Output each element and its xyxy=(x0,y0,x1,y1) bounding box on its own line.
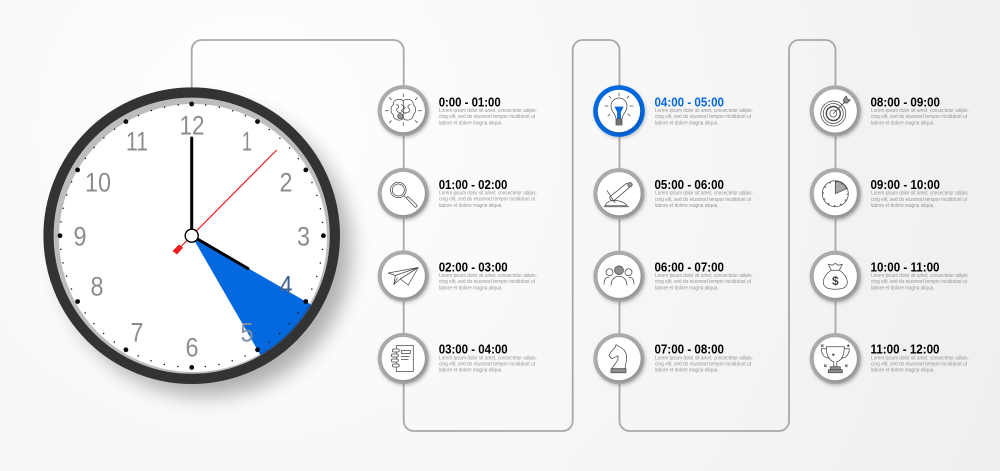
clock dark rim xyxy=(48,92,335,379)
description xyxy=(655,355,753,374)
node ring xyxy=(593,251,645,302)
clock numerals: 10 xyxy=(85,168,111,198)
description: Lorem ipsum dolor sit amet, consectetur adipis- xyxy=(871,191,969,197)
node ring xyxy=(810,85,861,137)
heading: 10:00 - 11:00 xyxy=(870,259,940,274)
step 03:00 - 04:00 xyxy=(378,333,537,384)
node ring xyxy=(810,333,861,384)
icon: magnifier xyxy=(390,182,417,207)
red second hand xyxy=(172,150,277,254)
description: labore et dolore magna aliqua. xyxy=(871,285,935,291)
description: cing elit, sed do eiusmod tempor incididunt ut xyxy=(871,362,967,368)
description: Lorem ipsum dolor sit amet, consectetur adipis- xyxy=(439,273,537,279)
description: cing elit, sed do eiusmod tempor incididunt ut xyxy=(655,114,751,120)
hour hand xyxy=(192,236,248,268)
step 06:00 - 07:00 xyxy=(593,251,753,302)
icon: brain xyxy=(385,94,421,126)
icon: chess knight xyxy=(609,345,627,373)
description: labore et dolore magna aliqua. xyxy=(871,120,935,126)
icon: notebook xyxy=(391,346,413,372)
icon: money bag: $ xyxy=(832,274,839,288)
step 04:00 - 05:00 highlighted xyxy=(593,85,753,137)
blue sector 04:00 to 05:00 xyxy=(192,236,311,355)
description: Lorem ipsum dolor sit amet, consectetur adipis- xyxy=(655,273,753,279)
description: labore et dolore magna aliqua. xyxy=(655,368,719,374)
description: Lorem ipsum dolor sit amet, consectetur adipis- xyxy=(871,273,969,279)
heading: 09:00 - 10:00 xyxy=(870,177,940,192)
description xyxy=(655,191,753,209)
icon: team xyxy=(604,266,634,285)
node ring xyxy=(593,168,645,219)
heading: 11:00 - 12:00 xyxy=(870,342,940,356)
node ring xyxy=(593,333,645,384)
clock numerals: 6 xyxy=(186,332,198,362)
description: labore et dolore magna aliqua. xyxy=(871,368,935,374)
description xyxy=(439,190,537,209)
heading: 08:00 - 09:00 xyxy=(870,94,940,110)
step 08:00 - 09:00 xyxy=(810,85,969,137)
clock numerals: 11 xyxy=(126,126,148,156)
clock numerals: 4 xyxy=(280,270,292,300)
icon: paper plane xyxy=(388,268,418,285)
description xyxy=(871,355,969,374)
description: cing elit, sed do eiusmod tempor incididunt ut xyxy=(655,362,751,368)
description: Lorem ipsum dolor sit amet, consectetur adipis- xyxy=(871,355,969,361)
description: labore et dolore magna aliqua. xyxy=(655,203,719,209)
minute dots xyxy=(60,104,323,367)
description: Lorem ipsum dolor sit amet, consectetur adipis- xyxy=(871,108,969,114)
step 0:00 - 01:00 xyxy=(378,85,537,136)
description: labore et dolore magna aliqua. xyxy=(655,120,719,126)
description xyxy=(871,108,969,126)
description xyxy=(439,355,537,374)
description: cing elit, sed do eiusmod tempor incididunt ut xyxy=(871,114,967,120)
clock numerals xyxy=(74,110,310,362)
heading: 05:00 - 06:00 xyxy=(654,177,724,192)
description: Lorem ipsum dolor sit amet, consectetur adipis- xyxy=(439,108,537,114)
icon: light bulb xyxy=(605,93,633,125)
heading: 0:00 - 01:00 xyxy=(439,94,501,110)
description: labore et dolore magna aliqua. xyxy=(439,368,503,374)
description xyxy=(439,273,537,291)
center pin xyxy=(185,229,198,242)
step 05:00 - 06:00 xyxy=(593,168,753,219)
description: cing elit, sed do eiusmod tempor incididunt ut xyxy=(871,279,967,285)
icon: money bag xyxy=(823,263,847,289)
hour dots xyxy=(58,102,326,370)
clock white face xyxy=(59,104,327,372)
clock numerals: 8 xyxy=(90,272,104,302)
minute hand xyxy=(190,138,193,236)
description: labore et dolore magna aliqua. xyxy=(655,285,719,291)
step 01:00 - 02:00 xyxy=(378,168,537,219)
clock numerals: 2 xyxy=(280,168,292,198)
description xyxy=(439,108,537,126)
step 02:00 - 03:00 xyxy=(378,250,537,302)
node ring xyxy=(378,333,429,384)
icon: trophy xyxy=(821,345,849,373)
heading: 03:00 - 04:00 xyxy=(439,342,508,356)
clock xyxy=(48,92,351,396)
description: labore et dolore magna aliqua. xyxy=(871,203,935,209)
description: Lorem ipsum dolor sit amet, consectetur adipis- xyxy=(439,190,537,196)
step 10:00 - 11:00 xyxy=(810,251,969,302)
step 09:00 - 10:00 xyxy=(810,168,969,219)
description xyxy=(655,108,753,126)
icon: microscope xyxy=(604,182,632,207)
heading: 02:00 - 03:00 xyxy=(439,259,508,274)
node ring xyxy=(810,168,861,219)
heading: 04:00 - 05:00 xyxy=(654,94,724,110)
clock gray inner ring xyxy=(52,96,332,376)
description: Lorem ipsum dolor sit amet, consectetur adipis- xyxy=(655,355,753,361)
step 11:00 - 12:00 xyxy=(810,333,969,384)
heading: 07:00 - 08:00 xyxy=(654,342,724,356)
icon: pie timer xyxy=(822,181,848,207)
description: cing elit, sed do eiusmod tempor incididunt ut xyxy=(439,114,535,120)
node ring xyxy=(378,250,429,302)
node ring xyxy=(378,85,429,136)
clock numerals: 5 xyxy=(240,318,254,348)
clock numerals: 3 xyxy=(297,222,310,252)
icon: target xyxy=(821,96,850,126)
step 07:00 - 08:00 xyxy=(593,333,753,384)
description: cing elit, sed do eiusmod tempor incididunt ut xyxy=(439,197,535,203)
description: cing elit, sed do eiusmod tempor incididunt ut xyxy=(871,197,967,203)
node ring xyxy=(593,85,645,137)
description: cing elit, sed do eiusmod tempor incididunt ut xyxy=(439,362,535,368)
description: cing elit, sed do eiusmod tempor incididunt ut xyxy=(655,279,751,285)
description: labore et dolore magna aliqua. xyxy=(439,203,503,209)
description xyxy=(871,273,969,291)
heading: 06:00 - 07:00 xyxy=(654,259,724,274)
heading: 01:00 - 02:00 xyxy=(439,177,507,192)
description: Lorem ipsum dolor sit amet, consectetur adipis- xyxy=(655,191,753,197)
connector line xyxy=(192,40,835,431)
clock numerals: 1 xyxy=(242,126,252,156)
clock numerals: 7 xyxy=(130,318,144,348)
node ring xyxy=(378,168,429,219)
description: labore et dolore magna aliqua. xyxy=(439,120,503,126)
description: labore et dolore magna aliqua. xyxy=(439,285,503,291)
description xyxy=(871,191,969,209)
description: cing elit, sed do eiusmod tempor incididunt ut xyxy=(655,197,751,203)
node ring xyxy=(810,251,861,302)
clock numerals: 12 xyxy=(180,110,204,140)
description: cing elit, sed do eiusmod tempor incididunt ut xyxy=(439,279,535,285)
clock shadow xyxy=(59,104,351,396)
description xyxy=(655,273,753,291)
clock numerals: 9 xyxy=(74,222,86,252)
description: Lorem ipsum dolor sit amet, consectetur adipis- xyxy=(655,108,753,114)
description: Lorem ipsum dolor sit amet, consectetur adipis- xyxy=(439,355,537,361)
